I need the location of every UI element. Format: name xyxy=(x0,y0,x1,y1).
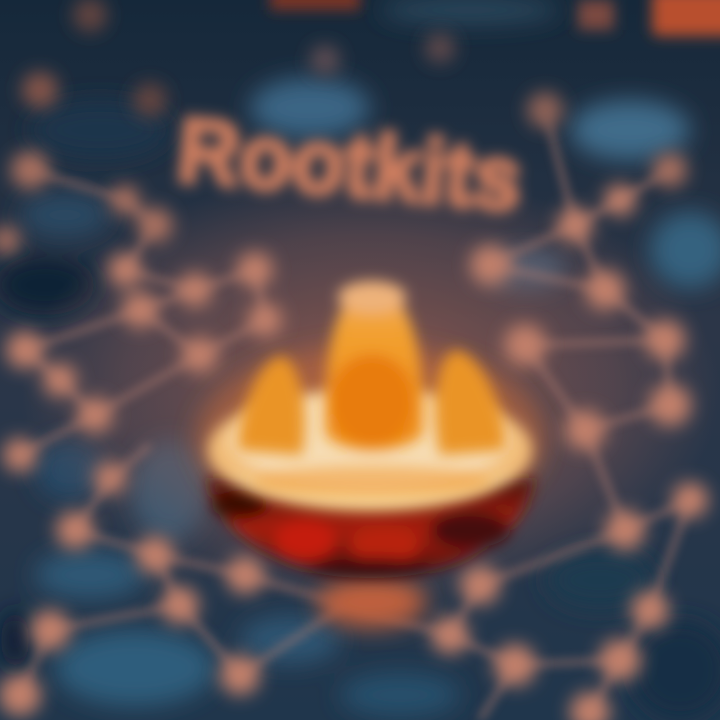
top right orange corner glow xyxy=(270,0,720,36)
heading: blurred title text: Rootkits xyxy=(174,99,526,231)
icon: glowing crown xyxy=(195,281,545,628)
crown orange lobes xyxy=(238,281,505,498)
crown glowing rim xyxy=(208,388,532,512)
central warm haze xyxy=(20,170,720,610)
network connecting lines xyxy=(20,110,690,720)
crown dark bowl xyxy=(208,478,534,578)
crown glow below xyxy=(195,345,545,628)
